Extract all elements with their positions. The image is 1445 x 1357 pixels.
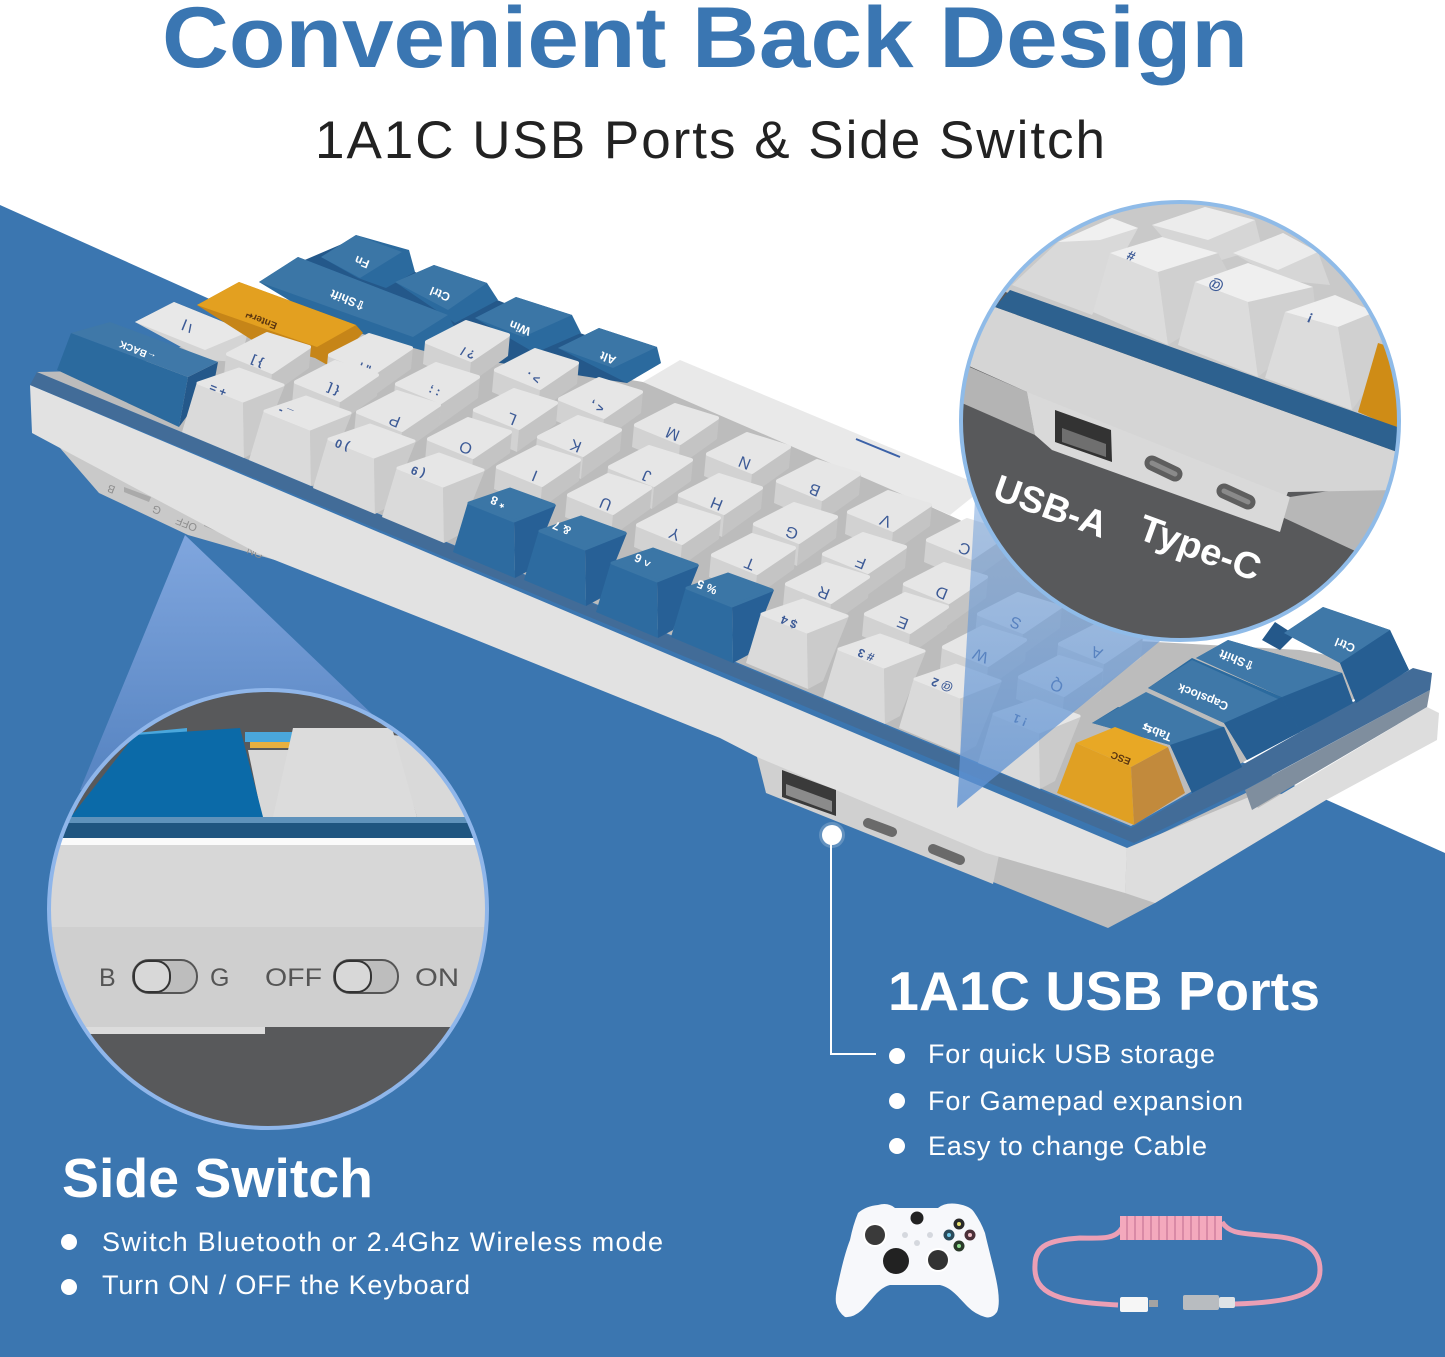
keycap row: qwerty: P xyxy=(387,410,403,430)
keycap row: home row: S xyxy=(1008,612,1024,632)
keycap row: number row: ( 9 xyxy=(409,463,427,481)
magnified ports xyxy=(1055,410,1248,502)
keycap: Esc orange xyxy=(1057,727,1185,825)
bullet list: USB uses: For quick USB storage xyxy=(928,1039,1215,1069)
keycap row: qwerty xyxy=(354,392,1103,719)
keycap row: number row: _ - xyxy=(276,404,295,422)
text block: 1A1C USB Ports xyxy=(888,960,1320,1161)
keycaps: right blue modifiers: Capslock xyxy=(1175,680,1230,713)
keyboard plate xyxy=(37,300,1405,826)
bullet list: switch functions xyxy=(61,1227,663,1300)
magnified keycaps: ! xyxy=(1305,310,1315,326)
keyboard underside with printed switch labels: G xyxy=(151,502,163,516)
subtitle: 1A1C USB Ports & Side Switch xyxy=(315,111,1105,170)
keyboard xyxy=(30,235,1439,928)
keycaps: right blue modifiers: Ctrl xyxy=(1333,635,1357,655)
keycap row: bracket and punctuation: M xyxy=(664,423,682,443)
keycap row: home row: { [ xyxy=(325,381,341,399)
power switch OFF / ON xyxy=(265,960,459,993)
keycap: backspace xyxy=(57,322,218,427)
keyboard underside with printed switch labels: OFF xyxy=(174,514,199,533)
magnified keycaps: # xyxy=(1124,247,1138,265)
keycap row: number row: $ 4 xyxy=(778,612,799,632)
keycaps: right blue modifiers: Tab⇆ xyxy=(1140,720,1174,744)
keycap row: bracket and punctuation xyxy=(224,322,1011,582)
keycap row: home row: F xyxy=(853,552,869,572)
keycap row: number row xyxy=(182,369,1081,789)
keycap: backslash: \ | xyxy=(180,319,194,335)
bullet list: USB uses: Easy to change Cable xyxy=(928,1131,1207,1161)
bullet list: USB uses: For Gamepad expansion xyxy=(928,1086,1243,1116)
keycap row: home row: K xyxy=(568,435,584,455)
magnifier: USB ports xyxy=(950,180,1410,640)
keycap row: qwerty: U xyxy=(597,493,615,513)
keycap row: bracket and punctuation: V xyxy=(878,510,894,530)
beam: side switch magnifier xyxy=(80,535,420,790)
mode switch B / G: B xyxy=(99,964,116,992)
keycap row: qwerty: E xyxy=(895,612,911,632)
keycap row: bracket and punctuation: N xyxy=(736,452,754,472)
text block: Side Switch xyxy=(61,1147,663,1300)
keycaps: back modifier row: ⇧Shift xyxy=(328,287,368,313)
keycap row: qwerty: Y xyxy=(667,523,683,543)
magnified case band xyxy=(1284,490,1386,550)
bullet list: switch functions: Switch Bluetooth or 2.4Ghz Wireless mode xyxy=(102,1227,663,1257)
keycaps: right blue modifiers: ⇧Shift xyxy=(1217,647,1257,673)
keycap row: number row: ) 0 xyxy=(333,436,351,454)
keycap row: qwerty: T xyxy=(742,553,758,573)
power switch OFF / ON: ON xyxy=(415,964,459,992)
keyboard underside with printed switch labels: B xyxy=(106,481,117,495)
bullet list: USB uses xyxy=(889,1039,1243,1161)
mode switch B / G xyxy=(99,960,229,993)
keycap row: bracket and punctuation: " ' xyxy=(359,354,375,372)
magnified keycaps: @ xyxy=(1206,274,1226,296)
keycap row: number row: % 5 xyxy=(694,577,719,597)
magnified case xyxy=(68,817,468,823)
keycap row: bracket and punctuation: > . xyxy=(524,369,542,387)
keycap row: bracket and punctuation: < , xyxy=(588,398,606,416)
bullet list: switch functions: Turn ON / OFF the Keyboard xyxy=(102,1270,470,1300)
keycap row: home row: D xyxy=(933,582,951,602)
keycap row: number row: # 3 xyxy=(855,645,876,665)
magnifier: side switch xyxy=(40,690,490,1128)
label: Type-C: Type-C xyxy=(1133,507,1267,589)
keycaps: back modifier row: Fn xyxy=(353,253,371,271)
magnified keycaps xyxy=(70,728,472,818)
keycaps: right blue modifiers xyxy=(1092,607,1409,793)
keycap row: home row xyxy=(292,362,1143,686)
beam: USB ports magnifier xyxy=(957,500,1210,808)
keycap: backslash xyxy=(135,302,248,362)
keycap row: qwerty: W xyxy=(970,644,991,666)
keycap row: bracket and punctuation: B xyxy=(807,479,823,499)
heading: Side Switch: Side Switch xyxy=(62,1147,373,1209)
keycap row: number row: @ 2 xyxy=(929,674,955,696)
keyboard case xyxy=(30,372,1439,928)
keycap row: bracket and punctuation: ? / xyxy=(458,344,477,362)
keycap: Esc orange: ESC xyxy=(1109,748,1133,766)
keycap row: home row: L xyxy=(505,408,519,428)
keycap row: qwerty: Q xyxy=(1048,675,1066,695)
keycap: backspace: ←BACK xyxy=(117,337,158,362)
magnified keycaps xyxy=(1006,204,1397,427)
keycap row: qwerty: R xyxy=(815,582,833,602)
keycaps: back modifier row: Alt xyxy=(598,349,618,367)
USB ports on keyboard xyxy=(782,770,960,860)
keycaps: back modifier row xyxy=(259,235,661,383)
keycap row: home row: J xyxy=(640,466,654,484)
keycap row: number row: & 7 xyxy=(550,518,573,538)
keycap row: qwerty: I xyxy=(530,466,540,484)
keycap row: bracket and punctuation: } ] xyxy=(249,353,265,371)
keycap row: number row: ^ 6 xyxy=(632,550,654,570)
keycap row: home row: : ; xyxy=(426,383,442,401)
keycap row: home row: G xyxy=(783,522,801,542)
keycap: Enter orange xyxy=(197,282,363,367)
keyboard underside with printed switch labels xyxy=(60,448,290,560)
power switch OFF / ON: OFF xyxy=(265,964,322,992)
keycaps: back modifier row: Ctrl xyxy=(428,284,452,304)
keycap row: number row: ! 1 xyxy=(1011,711,1029,729)
keycap row: number row: * 8 xyxy=(488,493,507,511)
keycap: Enter orange: Enter↵ xyxy=(243,308,279,331)
keyboard underside with printed switch labels: ON xyxy=(245,543,265,560)
keycap row: number row: + = xyxy=(207,380,229,400)
callout connector: USB ports xyxy=(819,822,876,1054)
keycaps: back modifier row: Win xyxy=(507,317,533,339)
keycap row: qwerty: O xyxy=(457,437,475,457)
keycap row: home row: A xyxy=(1089,642,1105,662)
keycap: space bar xyxy=(643,360,985,515)
mode switch B / G: G xyxy=(210,964,229,992)
label: USB-A: USB-A xyxy=(988,467,1113,546)
keycap row: bracket and punctuation: C xyxy=(956,538,974,558)
icon: white gamepad xyxy=(836,1204,999,1317)
keycap row: home row: H xyxy=(708,493,726,513)
heading: 1A1C USB Ports: 1A1C USB Ports xyxy=(888,960,1320,1022)
icon: pink coiled cable xyxy=(1035,1216,1320,1312)
